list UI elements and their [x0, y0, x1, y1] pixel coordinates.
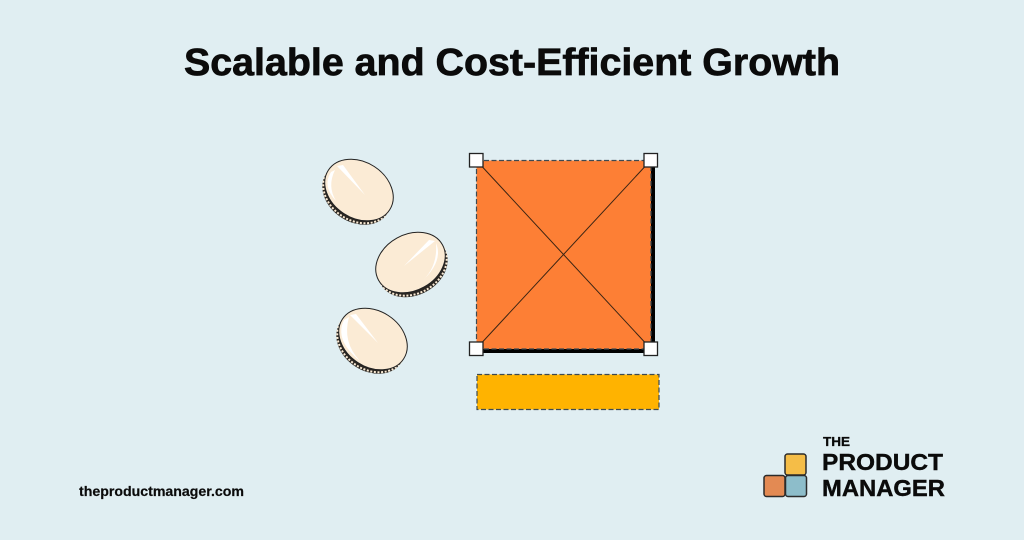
coin: middle: [365, 220, 458, 309]
frame shadow: [481, 165, 655, 353]
yellow dashed bar: [477, 374, 659, 410]
diagonal lines: [476, 160, 651, 349]
coin: bottom: [325, 296, 419, 386]
logo wordmark: PRODUCT: [822, 449, 943, 475]
logo blocks: [764, 454, 806, 496]
icon: three coins: [311, 147, 458, 386]
handle: bottom left: [470, 342, 483, 356]
logo wordmark: [822, 435, 945, 501]
website url: theproductmanager.com: [79, 484, 244, 499]
logo: The Product Manager: [764, 435, 945, 501]
orange square: [476, 160, 651, 349]
handle: top left: [470, 154, 483, 167]
handle: top right: [644, 154, 658, 167]
logo wordmark: THE: [823, 435, 850, 449]
icon: orange scaling frame with handles: [470, 154, 658, 356]
coin: top: [311, 147, 405, 237]
handle: bottom right: [644, 342, 658, 356]
logo wordmark: MANAGER: [822, 475, 945, 501]
title: Scalable and Cost-Efficient Growth: [184, 42, 840, 84]
